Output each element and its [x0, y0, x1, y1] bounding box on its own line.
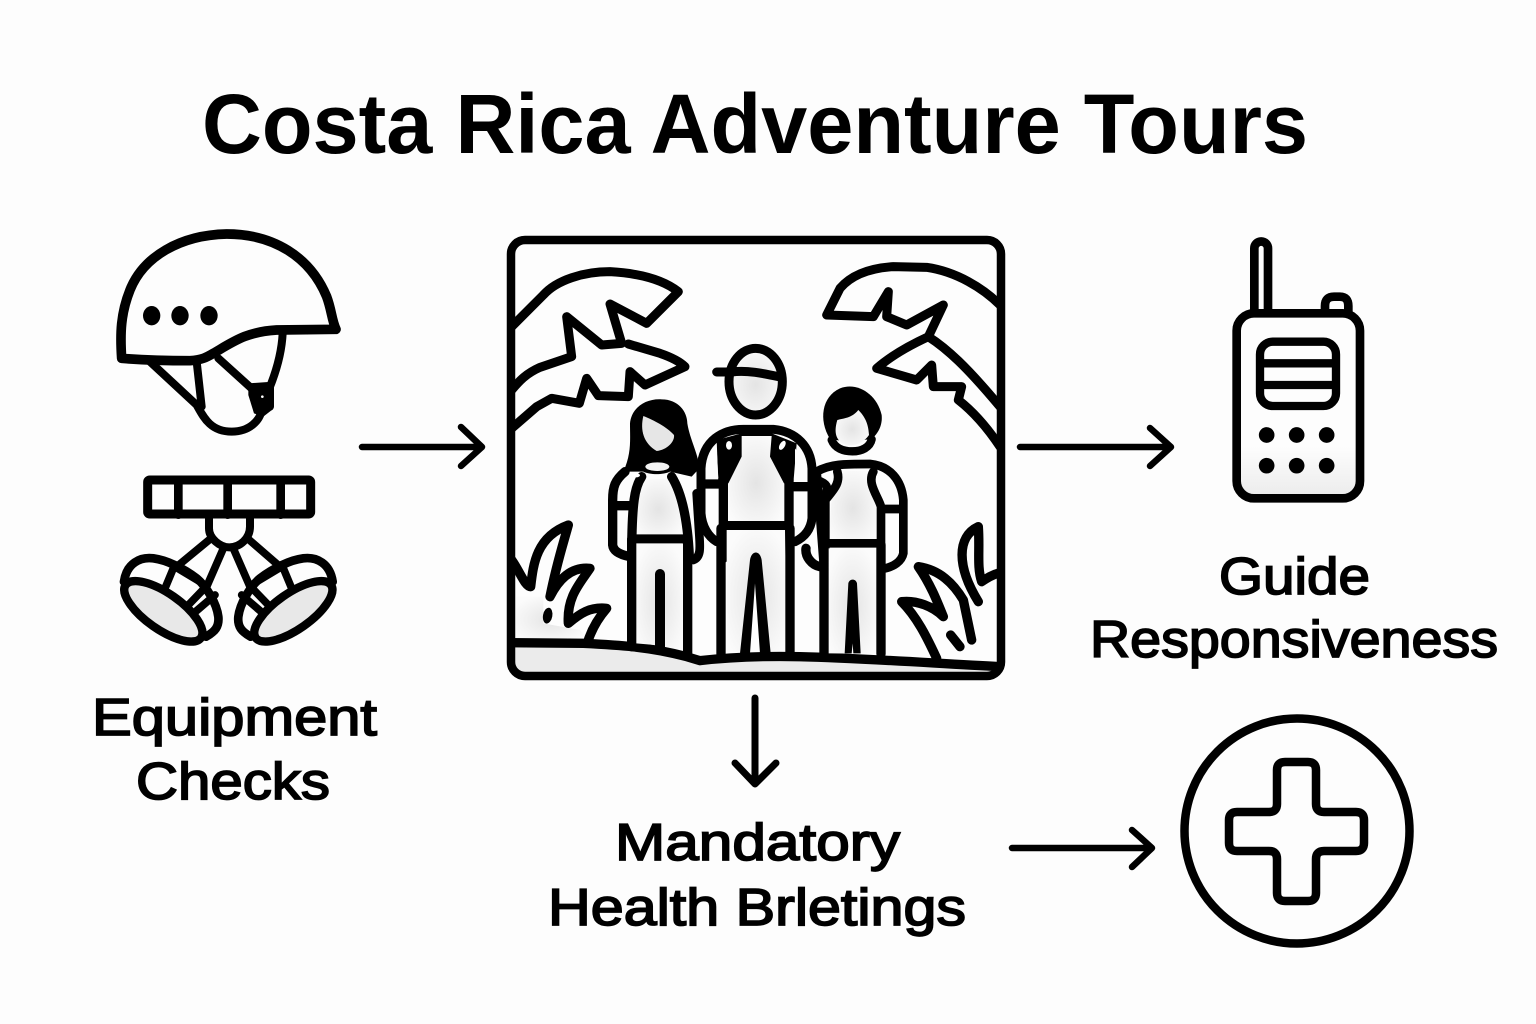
right leg loop	[238, 558, 341, 652]
arrow: group to guide	[1020, 428, 1171, 466]
label: mandatory health briefings	[548, 814, 966, 937]
frame	[511, 240, 1001, 676]
label: guide responsiveness	[1090, 548, 1498, 669]
left leg loop	[115, 558, 218, 652]
label: equipment checks: Checks	[136, 753, 330, 811]
plant: right	[902, 527, 1000, 658]
label: equipment checks	[92, 689, 378, 811]
leaves: top right	[827, 267, 1000, 447]
person: third hiker	[806, 386, 903, 654]
label: mandatory health briefings: Health Brletings	[548, 879, 966, 937]
icon: climbing harness	[115, 480, 341, 652]
icon: medical cross in circle	[1184, 718, 1410, 944]
label: guide responsiveness: Guide	[1219, 548, 1370, 606]
label: equipment checks: Equipment	[92, 689, 378, 747]
person: man with cap	[701, 348, 812, 654]
plant: left	[512, 525, 607, 640]
panel: tour group in jungle	[510, 240, 1001, 680]
label: mandatory health briefings: Mandatory	[615, 814, 900, 872]
label: guide responsiveness: Responsiveness	[1090, 611, 1498, 669]
icon: walkie-talkie	[1237, 241, 1360, 498]
arrow: group down to briefings	[735, 698, 776, 784]
person: woman	[613, 399, 700, 653]
ground	[515, 638, 997, 672]
title: Costa Rica Adventure Tours	[202, 77, 1308, 171]
leaves: top left	[512, 272, 685, 428]
arrow: equipment to group	[362, 427, 482, 466]
arrow: briefings to medical	[1012, 830, 1152, 867]
icon: climbing helmet	[121, 234, 336, 432]
